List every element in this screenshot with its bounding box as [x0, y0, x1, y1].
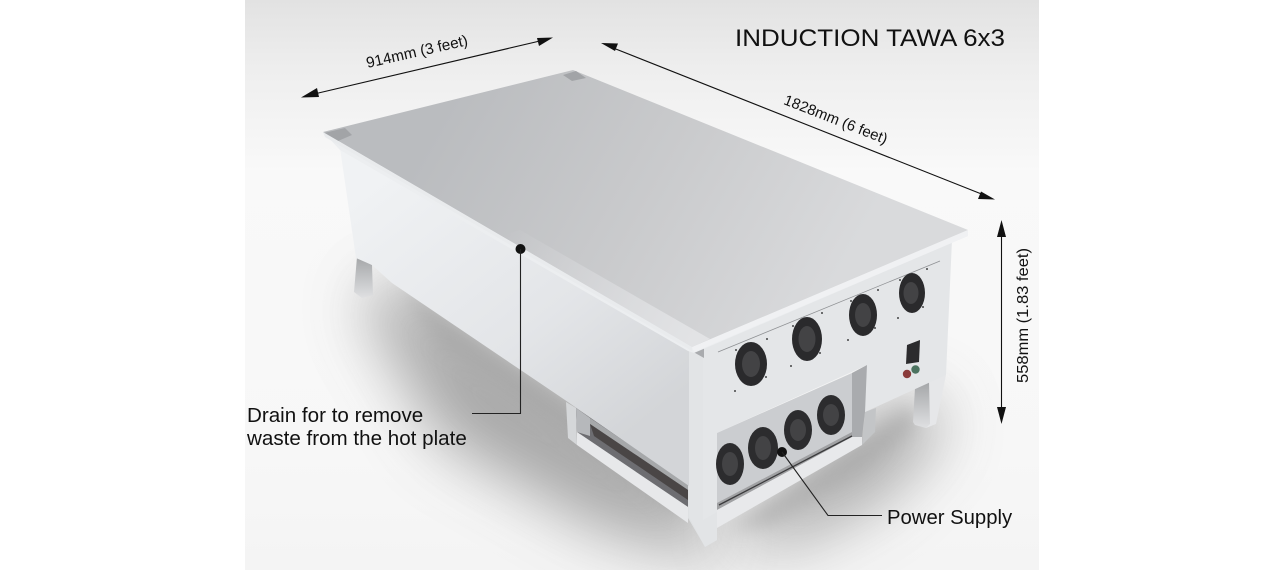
corner post — [689, 345, 717, 547]
callout: drain: Drain for to remove — [247, 404, 423, 427]
corner inset: back — [563, 71, 586, 81]
top plate — [323, 70, 968, 347]
callout: drain: waste from the hot plate — [246, 427, 467, 450]
title: INDUCTION TAWA 6x3 — [735, 25, 1005, 52]
callout: power supply: Power Supply — [887, 507, 1013, 529]
front panel — [703, 240, 952, 520]
arrow: 914mm width — [301, 38, 553, 98]
lower fans — [716, 395, 845, 485]
arrow: 558mm height — [997, 220, 1006, 424]
arrow: 1828mm length — [601, 43, 995, 200]
corner inset: left — [324, 128, 352, 141]
corner edge of plate — [323, 132, 692, 351]
near right leg — [913, 375, 946, 428]
callout: drain — [246, 244, 526, 450]
label: 914mm: 914mm (3 feet) — [365, 32, 470, 72]
lower frame — [566, 402, 717, 547]
plate bevels — [500, 230, 968, 352]
far leg — [354, 257, 373, 298]
rear right leg — [862, 408, 876, 445]
photo background — [245, 0, 1039, 570]
floor shadow — [360, 275, 945, 560]
lower fan hubs — [722, 404, 839, 476]
callout: power supply — [777, 447, 1013, 529]
upper fans — [718, 261, 940, 392]
power supply bay — [716, 365, 867, 528]
induction tawa unit — [323, 70, 968, 547]
top plate underside rim — [323, 132, 968, 353]
corner notch — [688, 344, 704, 358]
left side panel — [340, 148, 692, 486]
control panel — [903, 340, 920, 378]
label: 1828mm: 1828mm (6 feet) — [781, 92, 890, 148]
label: 558mm: 558mm (1.83 feet) — [1015, 248, 1032, 383]
